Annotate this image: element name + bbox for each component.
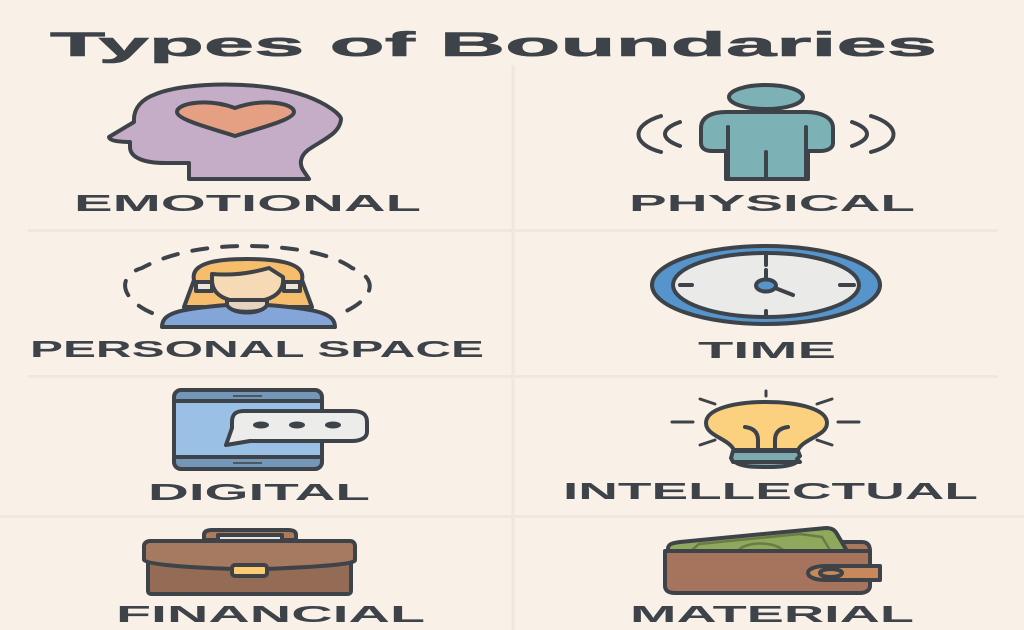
- label: financial: FINANCIAL: [116, 601, 425, 627]
- panel: time: [652, 246, 880, 363]
- icon: head with heart: [109, 84, 341, 179]
- label: intellectual: INTELLECTUAL: [563, 478, 978, 504]
- panel: physical: [629, 85, 915, 216]
- panel: personal space: [30, 246, 484, 362]
- label: digital: DIGITAL: [148, 479, 370, 505]
- label: personal space: PERSONAL SPACE: [30, 336, 484, 362]
- icon: woman in dashed circle: [125, 246, 370, 327]
- icon: person with signal arcs: [638, 85, 894, 179]
- panel: digital: [148, 390, 370, 505]
- icon: wallet with cash: [665, 528, 880, 593]
- panel: material: [630, 528, 914, 627]
- icon: clock: [652, 246, 880, 324]
- label: emotional: EMOTIONAL: [74, 190, 421, 216]
- label: physical: PHYSICAL: [629, 190, 915, 216]
- label: material: MATERIAL: [630, 601, 914, 627]
- panel: intellectual: [563, 391, 978, 504]
- label: time: TIME: [698, 337, 836, 363]
- icon: briefcase: [144, 530, 355, 594]
- title: Types of Boundaries: [50, 26, 937, 64]
- icon: phone with chat bubble: [174, 390, 367, 469]
- panel: financial: [116, 530, 425, 627]
- icon: light bulb: [672, 391, 859, 467]
- panel: emotional: [74, 84, 421, 216]
